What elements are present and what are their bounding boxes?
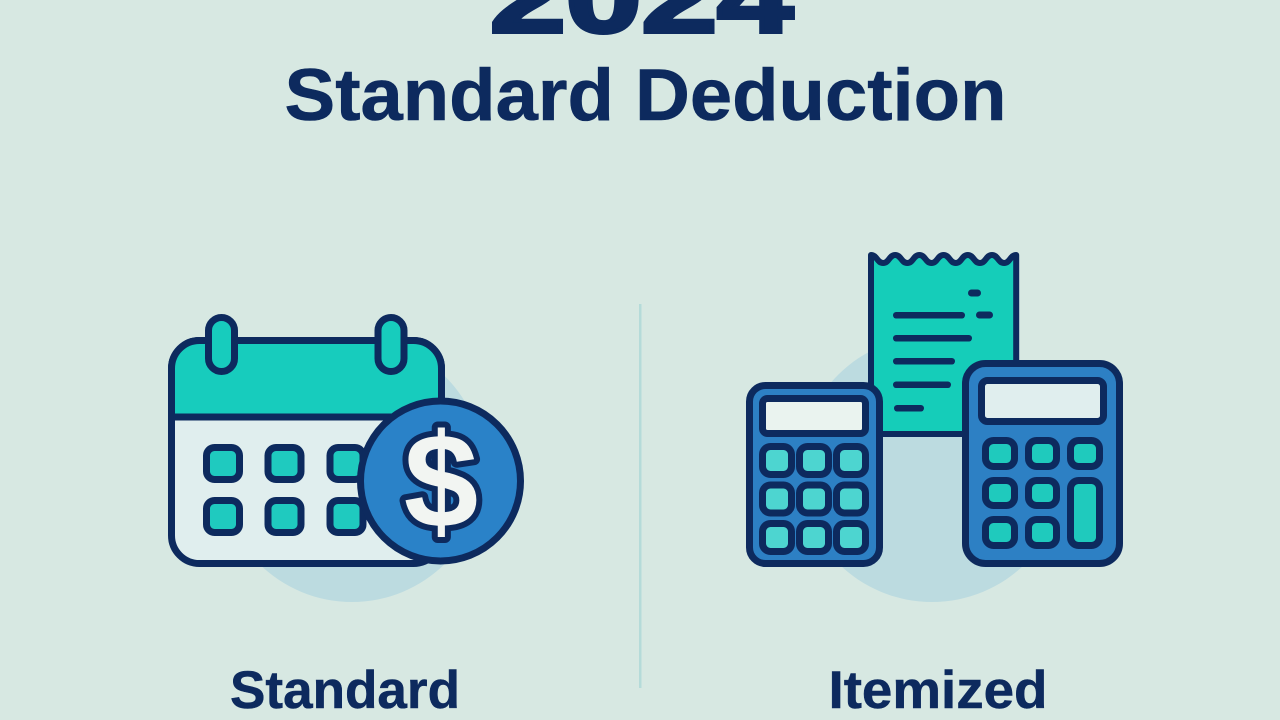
icon: calendar with dollar coin: $ — [404, 407, 478, 556]
small calculator — [750, 386, 880, 564]
heading: Standard Deduction — [284, 55, 1006, 136]
receipt — [871, 255, 1016, 434]
icon: calendar with dollar coin — [172, 318, 520, 602]
label: Itemized: Itemized — [828, 661, 1048, 720]
large calculator — [966, 364, 1120, 564]
label: Standard: Standard — [230, 661, 460, 720]
divider line — [639, 304, 642, 688]
icon: receipt and calculators — [750, 255, 1120, 602]
